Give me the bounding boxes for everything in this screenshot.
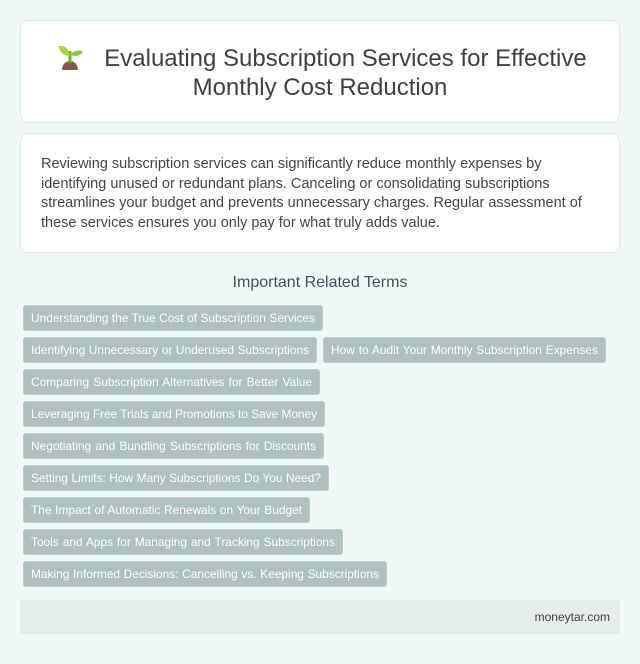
intro paragraph: streamlines your budget and prevents unnecessary charges. Regular assessment of	[41, 195, 582, 211]
tag: Leveraging Free Trials and Promotions to Save Money	[31, 407, 317, 421]
tag	[23, 433, 324, 459]
heading: important related terms: Important Related Terms	[233, 274, 407, 291]
tag	[23, 465, 329, 491]
tag	[23, 529, 343, 555]
panel: intro text card	[20, 133, 620, 253]
tag: The Impact of Automatic Renewals on Your Budget	[31, 503, 302, 517]
title: Evaluating Subscription Services for Effective	[104, 45, 587, 72]
tag	[323, 337, 606, 363]
title	[104, 45, 587, 101]
tag: How to Audit Your Monthly Subscription Expenses	[331, 343, 598, 357]
intro paragraph: identifying unused or redundant plans. Canceling or consolidating subscriptions	[41, 176, 550, 192]
tag: Negotiating and Bundling Subscriptions for Discounts	[31, 439, 316, 453]
panel: title card	[20, 20, 620, 123]
tag	[23, 497, 310, 523]
title: Monthly Cost Reduction	[193, 74, 447, 101]
tag: Making Informed Decisions: Cancelling vs. Keeping Subscriptions	[31, 567, 379, 581]
tag: Setting Limits: How Many Subscriptions Do You Need?	[31, 471, 321, 485]
tag	[23, 401, 325, 427]
tag: Understanding the True Cost of Subscription Services	[31, 311, 315, 325]
tag	[23, 369, 320, 395]
tag	[23, 561, 387, 587]
tag	[23, 337, 317, 363]
tag: Identifying Unnecessary or Underused Subscriptions	[31, 343, 309, 357]
tag	[23, 305, 323, 331]
tag: Comparing Subscription Alternatives for Better Value	[31, 375, 312, 389]
tag: Tools and Apps for Managing and Tracking Subscriptions	[31, 535, 335, 549]
intro paragraph: Reviewing subscription services can significantly reduce monthly expenses by	[41, 156, 542, 172]
intro paragraph: these services ensures you only pay for what truly adds value.	[41, 214, 440, 230]
footer bar	[20, 600, 620, 634]
footer source text: moneytar.com	[535, 610, 610, 624]
intro paragraph	[41, 156, 582, 230]
icon: seedling	[58, 46, 83, 70]
